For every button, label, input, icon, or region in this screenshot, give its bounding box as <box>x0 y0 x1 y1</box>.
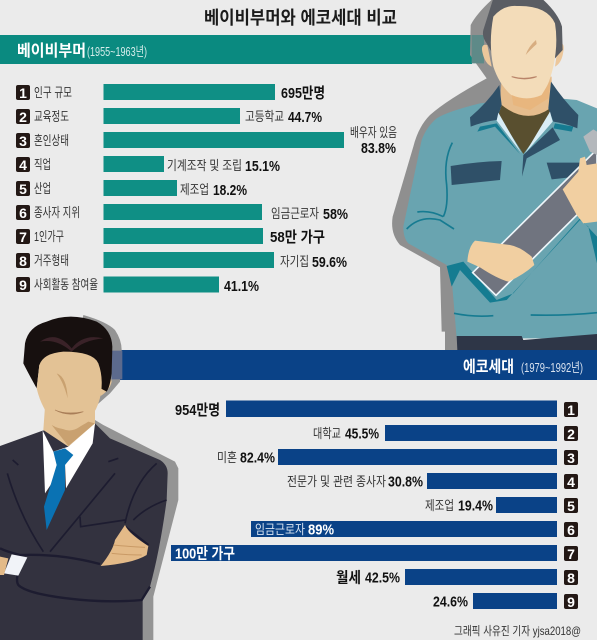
row 4 occupation: 4 <box>19 157 27 173</box>
row 3 marital status: 3 <box>19 133 27 149</box>
row 7 single households: 7 <box>19 229 27 245</box>
row 6 employment status: 임금근로자 <box>255 522 305 537</box>
row 9 social participation <box>16 276 259 295</box>
row 1 population: 954만명 <box>175 402 220 419</box>
hair <box>483 0 563 58</box>
row 3 marital status: 3 <box>567 450 575 466</box>
lapel lines <box>7 458 167 552</box>
lower hand <box>467 241 534 282</box>
row 9 social participation: 41.1% <box>224 278 259 295</box>
row 4 occupation <box>16 156 280 175</box>
figure shadow <box>67 315 178 640</box>
header band: baby boomers: 베이비부머 <box>17 42 86 60</box>
row 4 occupation: 기계조작 및 조립 <box>167 158 242 173</box>
tie <box>44 448 73 530</box>
row 8 housing: 월세 <box>336 570 361 586</box>
header band: baby boomers: (1955~1963년) <box>87 44 147 59</box>
row 2 education: 고등학교 <box>245 109 284 124</box>
shirt cuff <box>4 554 27 576</box>
row 8 housing: 8 <box>19 253 27 269</box>
row 1 population <box>175 400 578 419</box>
right hand <box>101 525 148 566</box>
row 5 industry: 18.2% <box>213 182 247 199</box>
row 1 population: 695만명 <box>281 85 325 102</box>
row 7 single households <box>16 228 325 246</box>
row 2 education: 2 <box>567 426 575 442</box>
undershirt <box>498 105 550 154</box>
ear <box>100 377 112 396</box>
row 2 education: 대학교 <box>313 426 341 441</box>
illustration: older worker <box>392 0 597 350</box>
row 5 industry <box>425 497 578 514</box>
row 8 housing: 8 <box>567 570 575 586</box>
row 2 education: 44.7% <box>288 109 322 126</box>
row 5 industry: 제조업 <box>180 182 209 197</box>
row 2 education: 2 <box>19 109 27 125</box>
row 1 population: 1 <box>567 402 575 418</box>
row 6 employment status: 6 <box>19 205 27 221</box>
row 5 industry: 산업 <box>34 181 51 196</box>
row 8 housing <box>336 569 578 586</box>
panel: baby boomer bar chart <box>16 84 397 295</box>
row 6 employment status <box>251 521 578 538</box>
face <box>491 6 556 100</box>
row 5 industry: 제조업 <box>425 498 454 513</box>
mouth <box>512 77 537 79</box>
row 7 single households: 7 <box>567 546 575 562</box>
tool shadow on jacket <box>447 218 597 303</box>
row 8 housing: 42.5% <box>365 570 400 586</box>
upper hand <box>563 157 597 223</box>
row 8 housing: 거주형태 <box>34 253 69 268</box>
row 2 education: 교육정도 <box>34 109 69 124</box>
jacket <box>403 97 597 338</box>
row 1 population: 인구 규모 <box>34 85 72 100</box>
row 4 occupation <box>287 473 578 490</box>
row 9 social participation: 사회활동 참여율 <box>34 277 98 292</box>
pockets <box>451 161 502 185</box>
neck <box>500 77 552 153</box>
row 6 employment status: 58% <box>323 206 348 223</box>
row 6 employment status: 6 <box>567 522 575 538</box>
header band: echo generation <box>112 350 597 380</box>
hair <box>23 317 112 392</box>
row 8 housing: 59.6% <box>312 254 347 271</box>
row 5 industry: 5 <box>19 181 27 197</box>
face <box>37 352 102 430</box>
row 3 marital status: 83.8% <box>361 140 396 157</box>
row 1 population: 1 <box>19 85 27 101</box>
panel: echo generation bar chart <box>171 400 578 610</box>
row 4 occupation: 4 <box>567 474 575 490</box>
row 8 housing <box>16 252 347 271</box>
collar <box>470 85 502 127</box>
neck <box>43 407 95 447</box>
row 4 occupation: 15.1% <box>245 158 280 175</box>
row 9 social participation: 24.6% <box>433 594 468 610</box>
row 9 social participation: 9 <box>19 277 27 293</box>
row 4 occupation: 30.8% <box>388 474 423 490</box>
row 2 education <box>16 108 322 126</box>
crossed arm lines <box>0 527 150 601</box>
row 7 single households <box>171 545 578 562</box>
left hand <box>0 557 8 575</box>
row 3 marital status: 미혼 <box>217 450 237 465</box>
figure shadow <box>392 0 513 350</box>
row 6 employment status: 임금근로자 <box>271 206 319 221</box>
trousers <box>457 334 597 350</box>
mouth <box>55 410 83 414</box>
row 5 industry: 5 <box>567 498 575 514</box>
nose shadow <box>57 373 68 398</box>
row 2 education: 45.5% <box>345 426 379 442</box>
row 3 marital status: 혼인상태 <box>34 133 69 148</box>
row 6 employment status: 종사자 지위 <box>34 205 80 220</box>
row 1 population <box>16 84 325 102</box>
finger lines <box>112 545 145 555</box>
row 6 employment status: 89% <box>308 522 334 538</box>
row 3 marital status <box>16 125 397 157</box>
row 9 social participation: 9 <box>567 594 575 610</box>
row 3 marital status: 배우자 있음 <box>350 125 397 140</box>
shirt collar <box>43 423 95 493</box>
sleeve creases <box>407 143 597 316</box>
tool: metal bar <box>473 149 597 295</box>
illustration: businessman <box>0 315 178 640</box>
ears <box>482 45 492 67</box>
row 5 industry: 19.4% <box>458 498 493 514</box>
row 3 marital status <box>217 449 578 466</box>
header band: echo generation: 에코세대 <box>463 358 514 376</box>
row 7 single households: 1인가구 <box>34 229 64 244</box>
suit <box>0 423 168 640</box>
row 8 housing: 자기집 <box>280 254 309 269</box>
title: 베이비부머와 에코세대 비교 <box>204 8 397 28</box>
nose shadow <box>526 40 537 55</box>
row 9 social participation <box>433 593 578 610</box>
row 5 industry <box>16 180 247 199</box>
row 4 occupation: 직업 <box>34 157 51 172</box>
row 6 employment status <box>16 204 348 223</box>
row 7 single households: 58만 가구 <box>270 229 325 246</box>
header band: baby boomers <box>0 35 472 64</box>
row 4 occupation: 전문가 및 관련 종사자 <box>287 474 386 489</box>
row 2 education <box>313 425 578 442</box>
row 7 single households: 100만 가구 <box>175 546 235 562</box>
row 3 marital status: 82.4% <box>240 450 275 466</box>
